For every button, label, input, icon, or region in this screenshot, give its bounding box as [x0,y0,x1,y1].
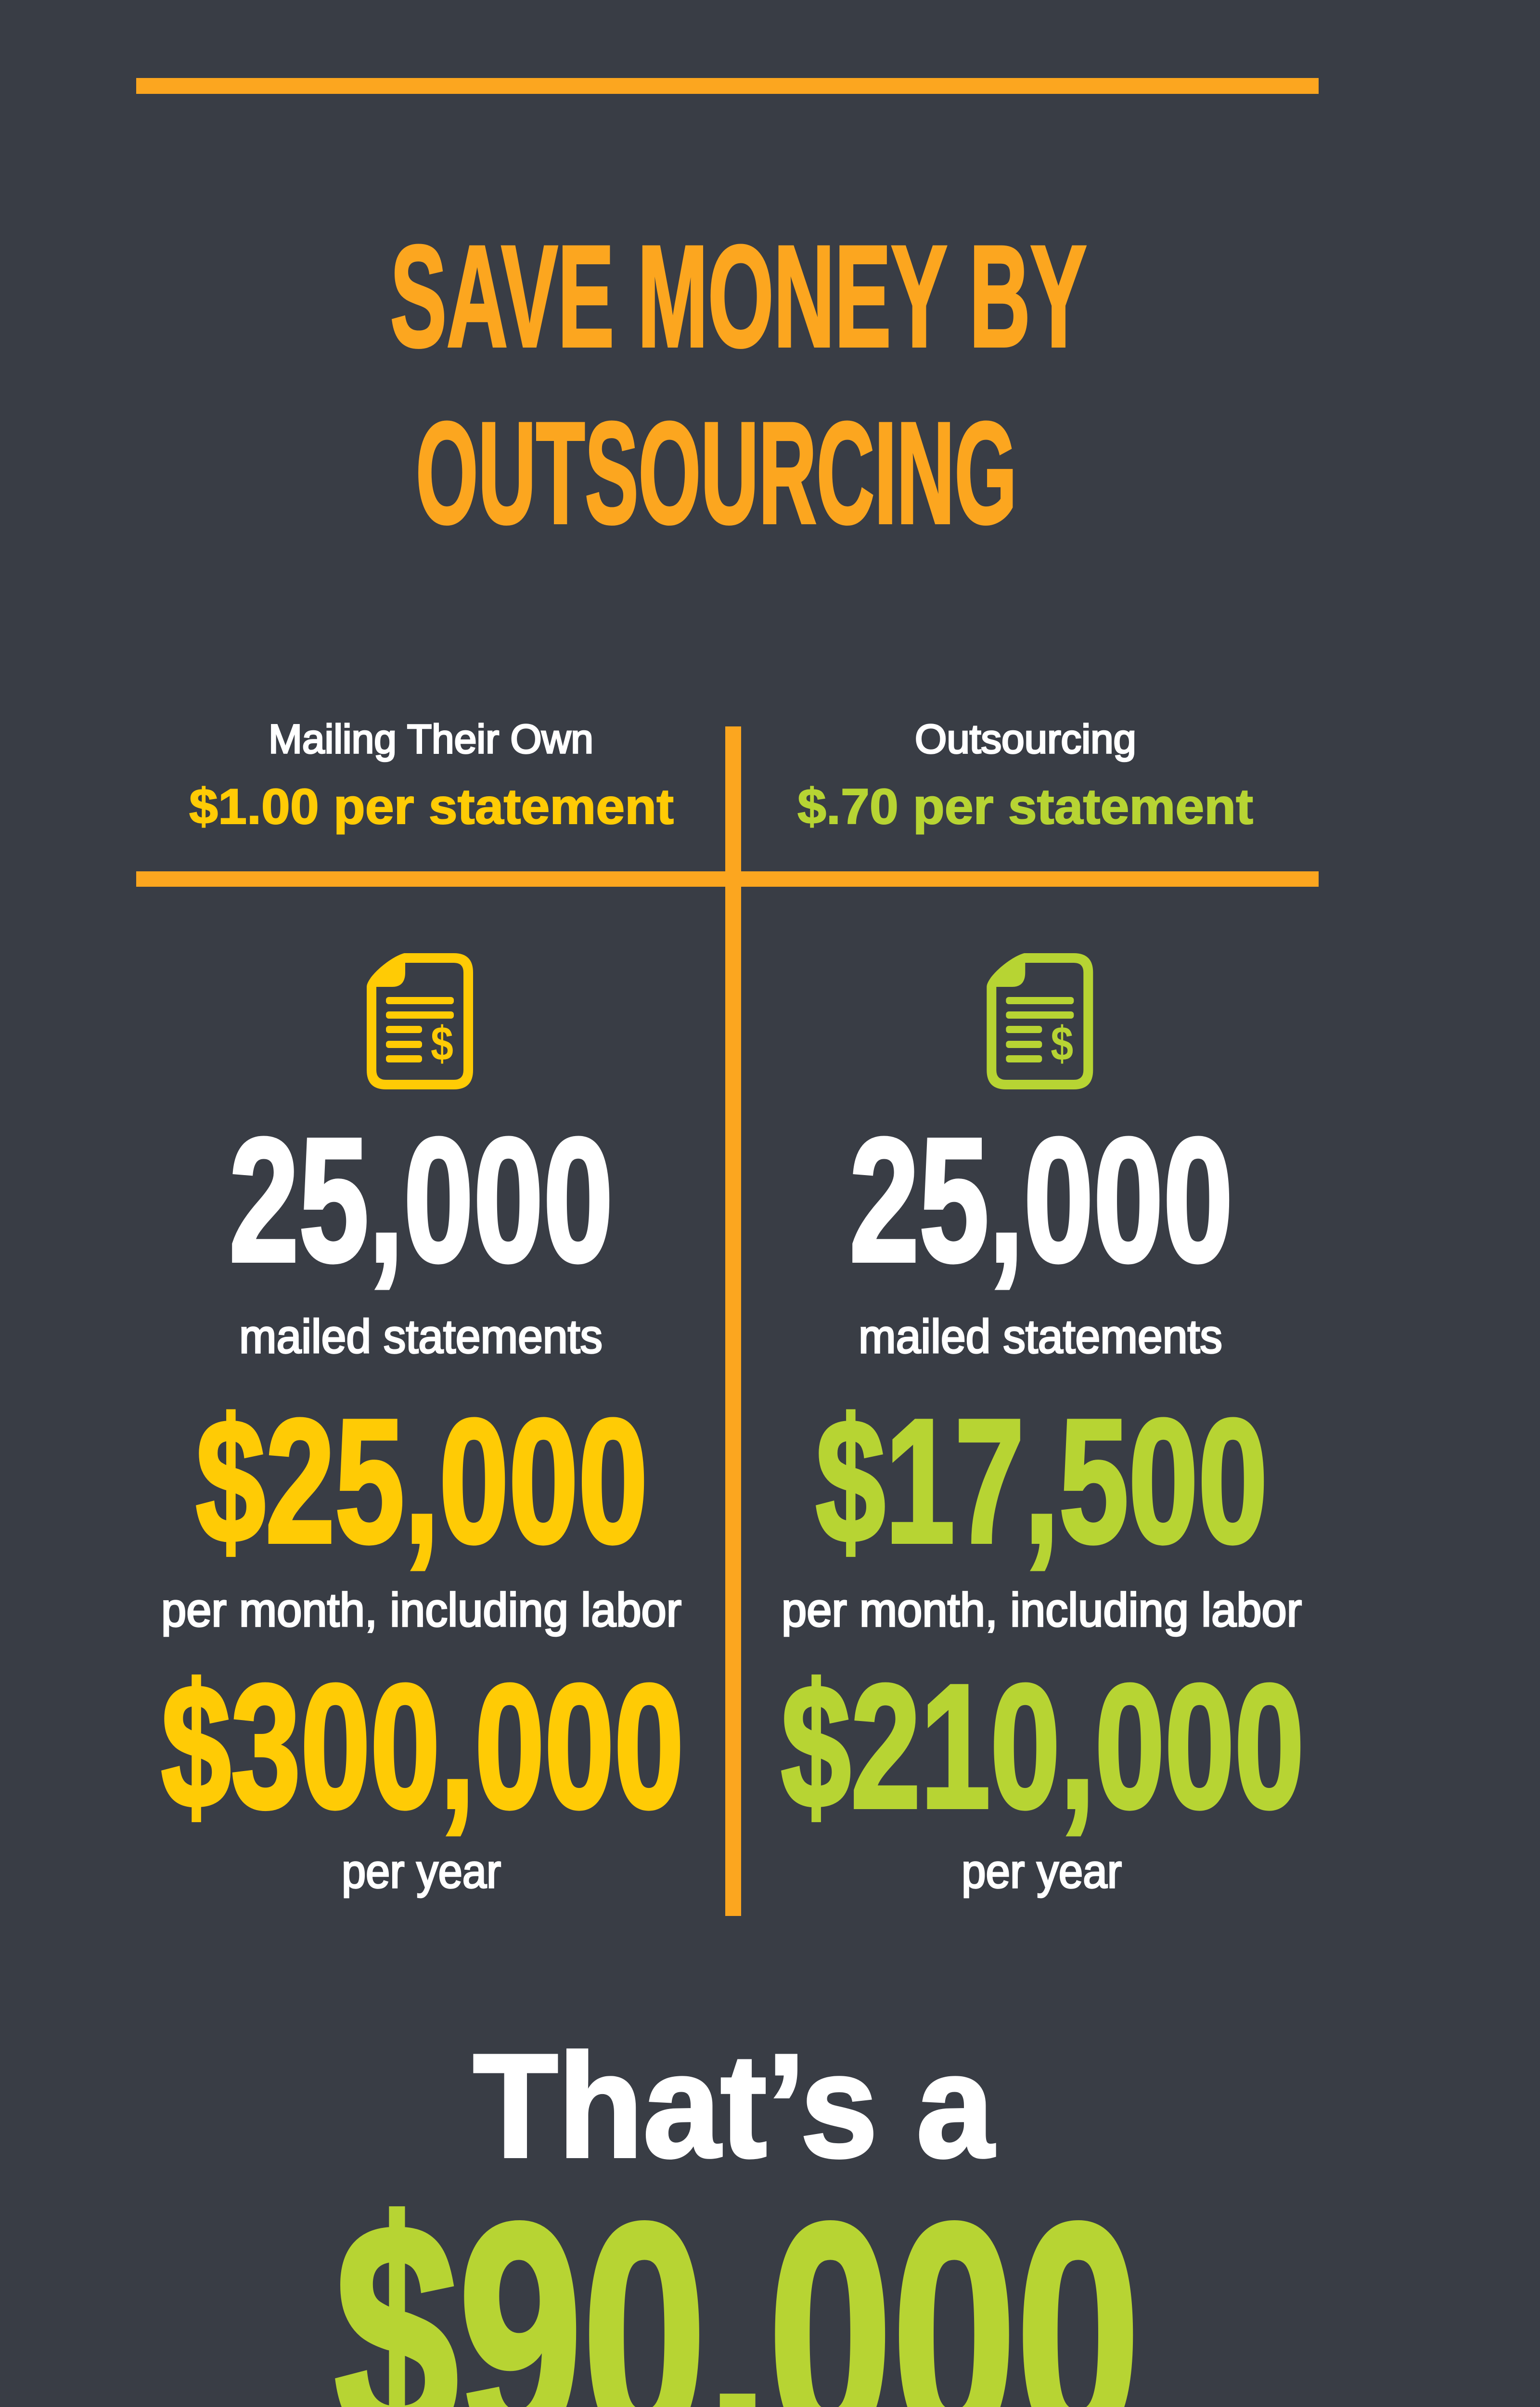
column header: mailing their own: $1.00 per statement [189,779,674,835]
title [390,215,1087,554]
icon: yellow statement document [367,953,473,1089]
monthly label: per month, including labor [782,1583,1302,1636]
vertical divider [725,726,741,1916]
statement label: mailed statements [239,1310,603,1363]
horizontal divider [136,871,1319,887]
statement count: 25,000 [849,1101,1233,1298]
yearly label: per year [962,1845,1122,1898]
column header: mailing their own [189,716,674,835]
column header: outsourcing: $.70 per statement [797,779,1253,835]
statement label: mailed statements [859,1310,1222,1363]
column header: outsourcing [797,716,1253,835]
yearly label: per year [342,1845,501,1898]
lead-in: That’s a [473,2023,995,2188]
right column figures [781,1101,1304,1898]
icon: yellow statement document: $ [431,1017,453,1071]
yearly cost: $210,000 [781,1648,1304,1845]
left column figures [161,1101,684,1898]
icon: green statement document: $ [1051,1017,1073,1071]
yearly cost: $300,000 [161,1648,684,1845]
title: OUTSOURCING [416,392,1017,554]
monthly cost: $17,500 [816,1383,1268,1579]
icon: green statement document [987,953,1093,1089]
monthly cost: $25,000 [196,1383,648,1579]
monthly label: per month, including labor [161,1583,681,1636]
statement count: 25,000 [229,1101,613,1298]
column header: outsourcing: Outsourcing [915,716,1136,762]
savings headline [239,2023,1229,2407]
top rule [136,78,1319,94]
column header: mailing their own: Mailing Their Own [269,716,593,762]
